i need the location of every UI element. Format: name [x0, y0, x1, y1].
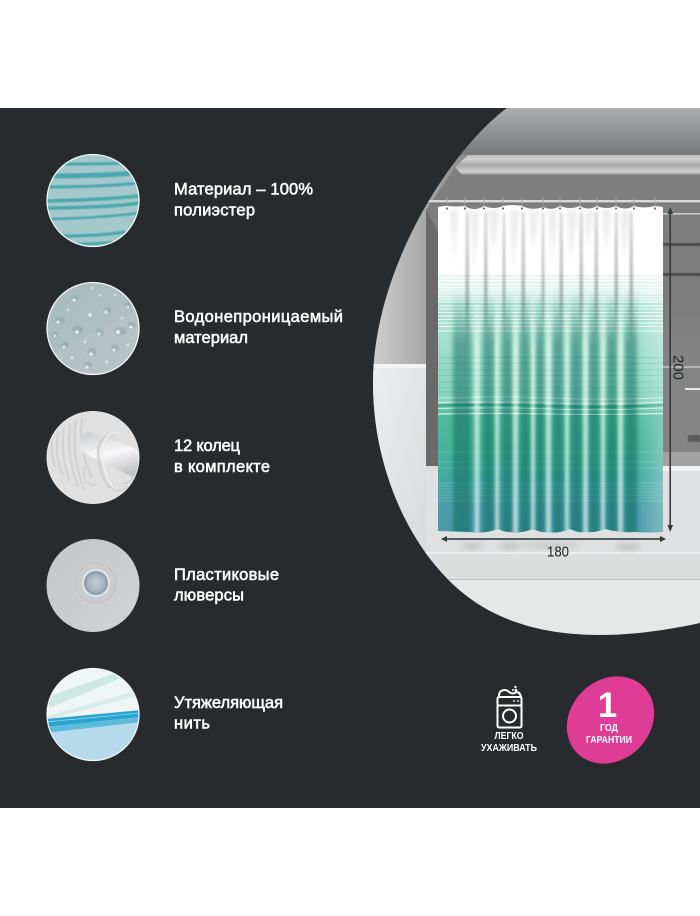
dimension label: 180: 180: [547, 544, 569, 560]
feature 2: waterproof: материал: [174, 329, 248, 347]
warranty badge: [549, 658, 672, 782]
icon: rings on a rod: [45, 409, 141, 507]
icon: striped fabric: [45, 152, 141, 250]
curtain shadow on the bath: [462, 542, 640, 551]
curtain rod: [428, 200, 700, 202]
bath front and floor: [425, 552, 700, 579]
wall tiles: [370, 366, 426, 556]
icon: washing machine: [498, 686, 522, 728]
warranty number: 1: [598, 686, 617, 725]
pleat shadows in white area: [466, 212, 632, 345]
photo: bathroom with shower curtain: [370, 108, 700, 649]
feature 1: material: [45, 152, 313, 250]
icon: plastic eyelet: [46, 539, 140, 632]
text: weighted thread: Утяжеляющая: [174, 694, 283, 712]
white stripes on mint area: [438, 306, 663, 331]
light and dark stripes above green band: [438, 397, 663, 399]
easy care badge: [481, 686, 537, 754]
feature 3: rings: [45, 409, 270, 507]
ceiling: [460, 108, 700, 155]
feature 4: eyelets: люверсы: [174, 586, 244, 604]
text: waterproof: Водонепроницаемый: [174, 308, 343, 326]
curtain rings: [447, 197, 655, 207]
feature 4: eyelets: [46, 539, 279, 632]
pale stripes near the hem: [438, 452, 663, 501]
upper part of the right niche: [663, 366, 700, 368]
feature 1: material: полиэстер: [174, 202, 255, 220]
right edge highlight: [639, 206, 663, 532]
feature 5: weighted thread: нить: [174, 714, 210, 732]
feature 3: rings: в комплекте: [174, 458, 270, 476]
dark folds: [453, 290, 637, 535]
dimension arrow: width: [441, 536, 666, 542]
teal stripes: [438, 358, 663, 392]
left wall: [370, 155, 468, 366]
text: rings: 12 колец: [174, 437, 241, 455]
pink egg shape: [549, 658, 672, 782]
cornice: [455, 155, 700, 175]
feature 2: waterproof: [45, 280, 343, 380]
soft fold shading under the eyelets: [450, 210, 630, 254]
warranty text: ГОД: [600, 722, 618, 734]
text: easy care: ЛЕГКО: [494, 730, 524, 742]
icon: water drops: [45, 280, 141, 380]
icon: blue hem thread: [45, 666, 141, 764]
dimension arrow: height: [668, 207, 673, 532]
easy care badge: УХАЖИВАТЬ: [481, 742, 537, 754]
shower curtain: [438, 204, 663, 535]
back wall: [370, 108, 700, 473]
dimension label: 200: 200: [670, 355, 686, 380]
eyelets: [446, 207, 656, 210]
warranty badge: ГАРАНТИИ: [586, 734, 632, 746]
text: material: Материал – 100%: [174, 180, 313, 198]
feature 5: weighted thread: [45, 666, 283, 764]
pale stripes on white area: [438, 276, 663, 300]
dark background panel: [0, 108, 700, 808]
text: eyelets: Пластиковые: [174, 566, 279, 584]
light folds: [474, 300, 623, 535]
